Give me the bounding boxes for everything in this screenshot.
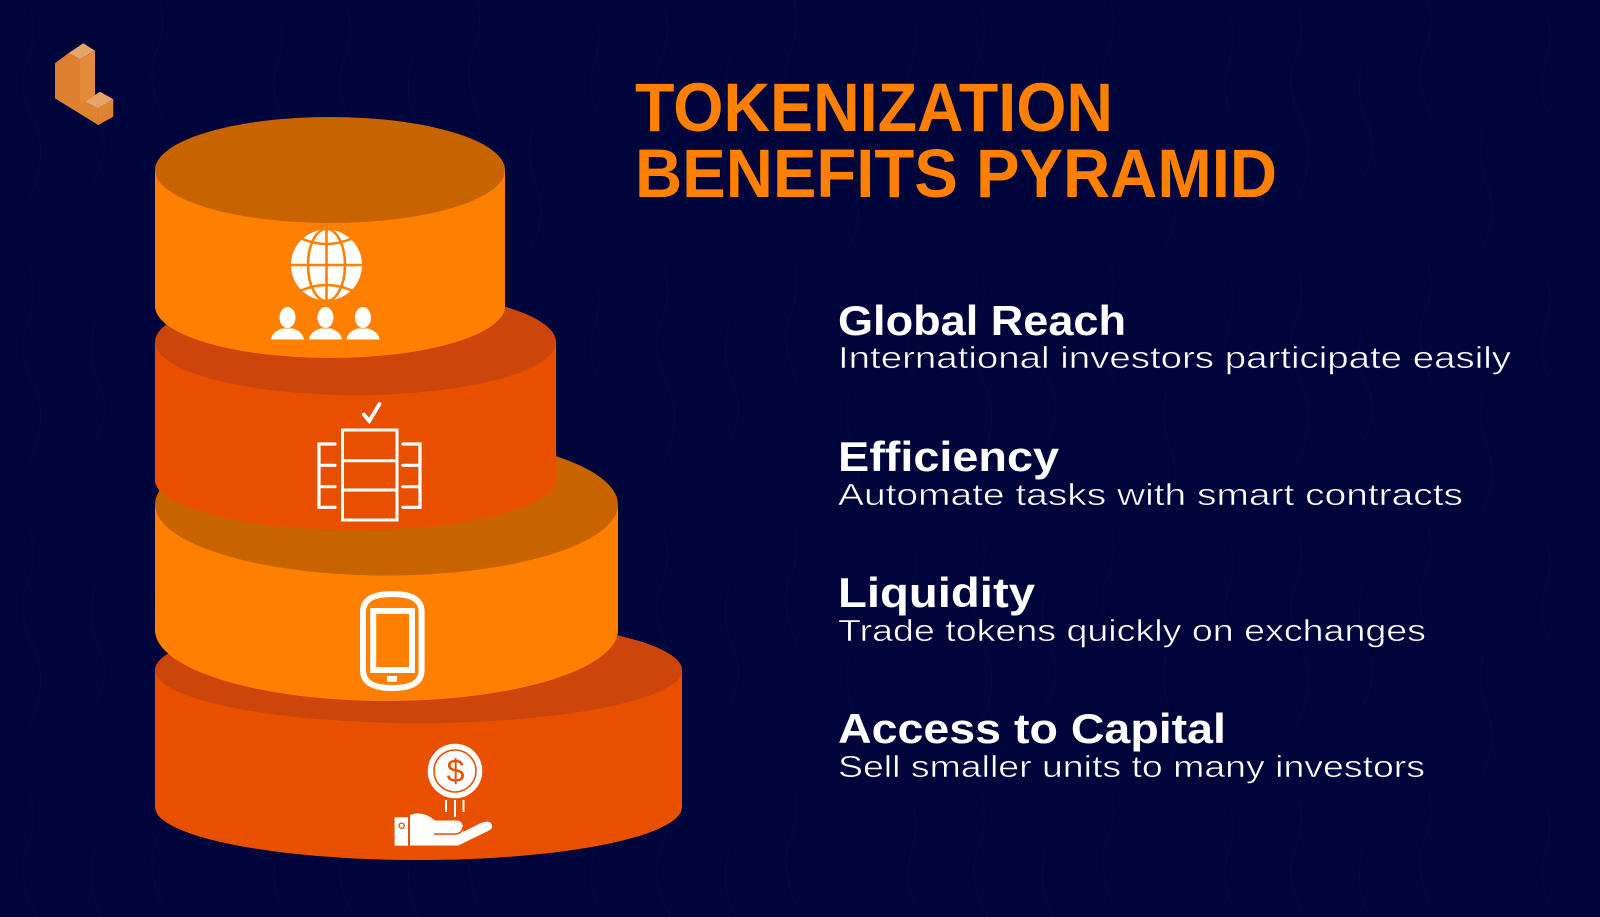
benefit: liquidity: Trade tokens quickly on exchanges [838, 613, 1426, 648]
icon: hand receiving coin: $ [447, 753, 465, 789]
title: TOKENIZATION [635, 69, 1113, 146]
benefit list [838, 297, 1512, 784]
benefit: efficiency [838, 433, 1463, 512]
benefit: access to capital [838, 705, 1425, 784]
tier 4: access to capital [155, 617, 682, 860]
icon: hand receiving coin [395, 744, 492, 846]
tier 2: efficiency [155, 289, 556, 530]
benefit: global reach: Global Reach [838, 297, 1126, 344]
benefit: global reach [838, 297, 1512, 375]
benefit: liquidity [838, 569, 1426, 648]
benefit: efficiency: Efficiency [838, 433, 1060, 480]
benefit: access to capital: Sell smaller units to many investors [838, 749, 1425, 784]
logo: orange isometric L [55, 43, 113, 125]
benefit: efficiency: Automate tasks with smart contracts [838, 477, 1463, 512]
benefit: global reach: International investors participate easily [838, 340, 1512, 375]
pyramid of stacked cylinders [155, 117, 682, 860]
title: BENEFITS PYRAMID [635, 135, 1277, 212]
icon: smartphone [363, 594, 422, 688]
icon: globe with three people [271, 229, 380, 340]
icon: checklist block with brackets [319, 404, 420, 520]
benefit: liquidity: Liquidity [838, 569, 1036, 616]
tier 1: global reach [155, 117, 505, 358]
title [635, 69, 1277, 212]
tier 3: liquidity [155, 434, 618, 701]
benefit: access to capital: Access to Capital [838, 705, 1226, 752]
